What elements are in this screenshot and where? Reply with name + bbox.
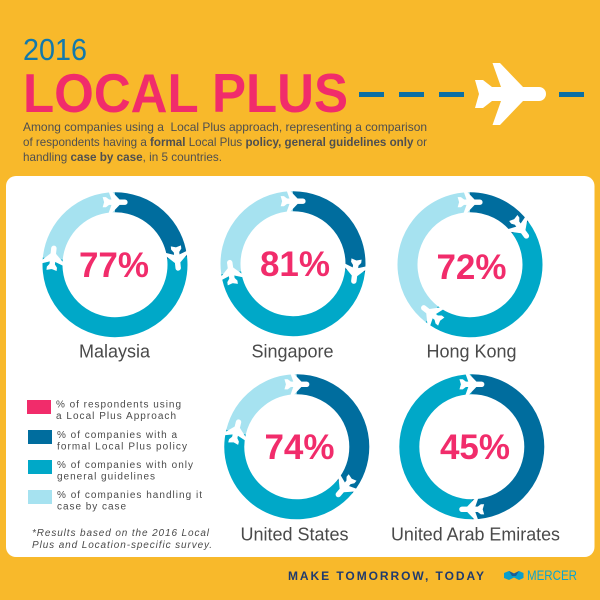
flight path with plane [359,63,584,125]
legend item: general guidelines [28,460,193,482]
legend item: case by case: % of companies handling it [57,490,202,501]
footnote [32,528,212,551]
value: Malaysia: 77% [79,246,149,285]
legend item: respondents [27,400,181,422]
legend item: general guidelines: general guidelines [57,472,155,482]
value: United States: 74% [264,428,335,467]
donut: Hong Kong [382,177,558,352]
panel: results [6,176,594,557]
legend item: respondents: a Local Plus Approach [56,411,176,422]
legend [27,400,202,512]
label: Singapore: Singapore [251,342,334,362]
donut: Malaysia [41,192,189,333]
label: Malaysia: Malaysia [79,342,151,362]
intro text [23,120,427,164]
legend item: case by case [28,490,202,512]
label: United States: United States [240,524,349,544]
value: United Arab Emirates: 45% [440,428,510,467]
label: Hong Kong: Hong Kong [426,342,517,362]
title: LOCAL PLUS [23,62,348,124]
icon: plane [475,63,546,125]
label: United Arab Emirates: United Arab Emirates [391,524,560,544]
value: Singapore: 81% [260,245,330,284]
legend item: respondents: % of respondents using [56,400,181,410]
tagline: MAKE TOMORROW, TODAY [288,569,484,583]
legend item: formal policy: % of companies with a [57,430,177,441]
donut: Singapore [219,191,367,334]
legend item: case by case: case by case [57,502,126,512]
legend item: formal policy: formal Local Plus policy [57,442,187,452]
footnote: Plus and Location-specific survey. [32,540,212,551]
value: Hong Kong: 72% [436,248,507,287]
donut: United States [209,359,385,535]
legend item: general guidelines: % of companies with only [57,460,193,471]
intro text: handling case by case, in 5 countries. [23,150,222,164]
icon: Mercer logo [504,571,524,580]
footnote: *Results based on the 2016 Local [32,528,210,539]
intro text: Among companies using a Local Plus approach, representing a comparison [23,120,427,134]
year heading: 2016 [23,32,87,67]
donut: United Arab Emirates [409,374,534,520]
legend item: formal policy [28,430,187,452]
Mercer wordmark: MERCER [527,567,577,583]
intro text: of respondents having a formal Local Plus policy, general guidelines only or [23,135,427,149]
